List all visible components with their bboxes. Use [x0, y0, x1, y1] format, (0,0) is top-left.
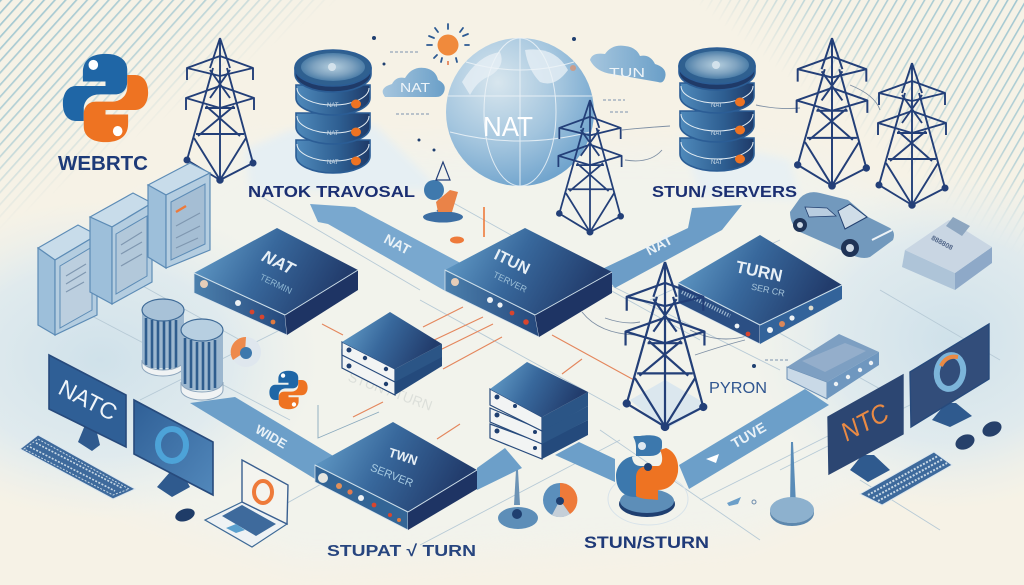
server: ITUN [445, 228, 612, 337]
orange marker [450, 207, 484, 244]
icon: sun [427, 24, 469, 65]
mouse [174, 506, 196, 524]
equipment box [902, 217, 992, 290]
arrow label: TUVE: TUVE [728, 419, 769, 451]
tower 4 [876, 63, 948, 208]
router [787, 334, 879, 399]
rack 2 [90, 193, 152, 304]
icon: python small [269, 371, 308, 409]
label: STUN/ SERVERS: STUN/ SERVERS [652, 184, 797, 201]
mouse right A [953, 431, 977, 453]
arrow band: TUVE [679, 389, 829, 489]
arrow marker [706, 454, 719, 463]
rack 1 [38, 225, 97, 335]
arrow label: WIDE: WIDE [253, 422, 290, 452]
database stack right: NAT [711, 160, 723, 166]
label: PYRON: PYRON [709, 380, 767, 397]
server label: NAT [259, 247, 299, 279]
disc icon bottom [543, 483, 577, 517]
arrow band: NAT right [600, 205, 742, 288]
connector bands to python [477, 442, 615, 490]
server label: ITUN [491, 247, 532, 278]
globe [446, 38, 594, 186]
stacked switches: three tier [490, 362, 588, 459]
cloud: TUN: TUN [609, 65, 645, 80]
arrow band: NAT left [310, 204, 470, 292]
arrow label: NAT right: NAT [643, 231, 675, 259]
server: NAT [194, 228, 358, 335]
tower 1 [184, 38, 256, 183]
cloud: NAT [383, 68, 445, 97]
database stack right [679, 48, 755, 171]
faint floor label: STUN / TURN [346, 368, 435, 414]
stacked switches: two tier [342, 312, 442, 395]
monitor: NATC: NATC [54, 374, 122, 426]
rack 3 [148, 163, 210, 268]
icon: python WebRTC logo [63, 54, 148, 142]
monitor: NTC: NTC [835, 397, 894, 447]
monitor: NATC [49, 355, 126, 451]
database stack right: NAT [711, 131, 723, 137]
disc icon [231, 337, 261, 367]
server label: TURN [734, 257, 784, 286]
arrow label: NAT: NAT [381, 231, 414, 258]
arrow band: wide [190, 397, 335, 482]
car [790, 192, 894, 258]
heading: WEBRTC: WEBRTC [58, 153, 148, 175]
equipment box: 888808 [930, 235, 954, 252]
database stack right: NAT [711, 103, 723, 109]
tower 2 [557, 100, 623, 235]
server: ITUN: TERVER [491, 270, 529, 295]
laptop [205, 460, 288, 547]
server: TURN [678, 235, 842, 344]
cloud: NAT: NAT [400, 80, 430, 95]
database stack left: NAT [327, 103, 339, 109]
server: TWN [315, 422, 477, 530]
antenna left [498, 470, 538, 529]
tower 3 [795, 38, 869, 189]
mouse right B [980, 418, 1004, 440]
database stack left [295, 50, 371, 173]
server: TWN: SERVER [368, 462, 415, 490]
keyboard right [860, 452, 952, 505]
database stack left: NAT [327, 160, 339, 166]
globe label: NAT: NAT [483, 111, 533, 142]
cylinder right [181, 319, 223, 400]
monitor: ring [134, 400, 213, 497]
label: NATOK TRAVOSAL: NATOK TRAVOSAL [248, 184, 415, 201]
monitor: ring right [910, 324, 989, 427]
monitor: NTC [828, 375, 903, 482]
database stack left: NAT [327, 131, 339, 137]
small python figure [423, 162, 463, 222]
cloud: TUN [590, 46, 666, 82]
keyboard left [20, 435, 135, 499]
tower 5 [624, 262, 708, 430]
icon: python on pedestal [608, 435, 688, 525]
label: STUPAT TURN: STUPAT √ TURN [327, 543, 476, 560]
label: STUN/STURN: STUN/STURN [584, 533, 709, 552]
antenna right [770, 442, 814, 526]
server: TURN: SER CR [750, 282, 786, 299]
small device [727, 497, 756, 506]
cylinder left [142, 299, 184, 376]
server: NAT: TERMIN [258, 272, 294, 296]
server label: TWN [387, 445, 420, 468]
